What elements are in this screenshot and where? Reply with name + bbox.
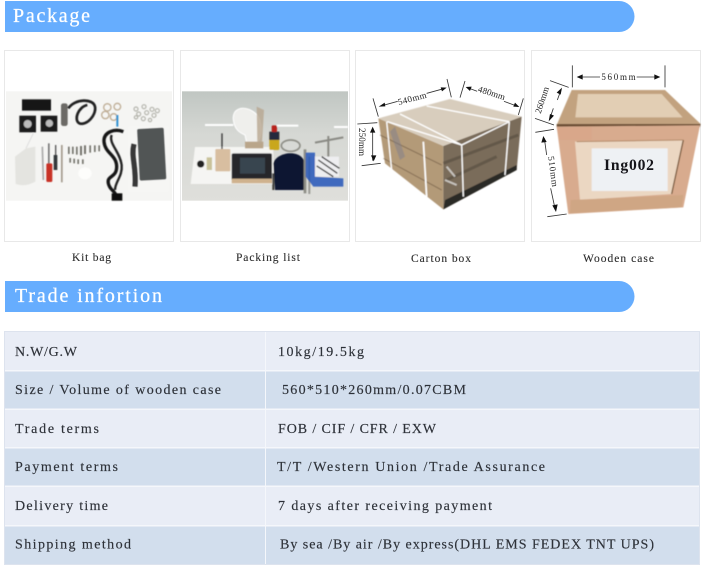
row: trade terms: FOB / CIF / CFR / EXW bbox=[278, 422, 437, 437]
row: payment terms: Payment terms bbox=[15, 460, 118, 475]
row: delivery time bbox=[5, 487, 699, 525]
row: trade terms bbox=[5, 410, 699, 447]
dimension: 540mm bbox=[373, 79, 451, 117]
photo: wooden case with label bbox=[533, 65, 701, 217]
row: size and volume: Size / Volume of wooden case bbox=[15, 383, 221, 398]
row: trade terms: Trade terms bbox=[15, 422, 99, 437]
dimension: 510mm: 510mm bbox=[546, 156, 560, 187]
panel: carton box bbox=[356, 50, 524, 242]
caption: Carton box: Carton box bbox=[411, 253, 471, 265]
row: shipping method: By sea /By air /By express(DHL EMS FEDEX TNT UPS) bbox=[280, 538, 654, 552]
dimension: 250mm bbox=[357, 123, 381, 166]
row: payment terms bbox=[5, 448, 699, 486]
heading bar: Trade infortion bbox=[5, 281, 634, 312]
dimension: 250mm: 250mm bbox=[357, 128, 367, 156]
row: delivery time: Delivery time bbox=[15, 499, 108, 514]
photo: kit bag contents bbox=[6, 91, 172, 201]
row: N.W/G.W: N.W/G.W bbox=[15, 345, 78, 360]
label: Ing002: Ing002 bbox=[604, 157, 654, 174]
dimension: 260mm bbox=[533, 81, 569, 125]
row: size and volume: 560*510*260mm/0.07CBM bbox=[282, 383, 467, 398]
dimension: 510mm bbox=[535, 129, 567, 217]
caption: Kit bag: Kit bag bbox=[72, 252, 111, 264]
dimension: 560mm bbox=[572, 65, 665, 87]
row: shipping method: Shipping method bbox=[15, 538, 131, 552]
table: trade information bbox=[4, 332, 700, 564]
caption: Wooden case: Wooden case bbox=[583, 253, 654, 265]
photo: taped carton box bbox=[357, 79, 523, 209]
heading bar: Package: Package bbox=[13, 5, 90, 27]
row: N.W/G.W: 10kg/19.5kg bbox=[278, 345, 364, 360]
panel: packing list bbox=[180, 50, 350, 242]
row: size and volume bbox=[5, 372, 699, 408]
panel: wooden case bbox=[532, 50, 701, 242]
panel: kit bag bbox=[4, 50, 174, 242]
dimension: 480mm bbox=[460, 81, 523, 115]
dimension: 480mm: 480mm bbox=[477, 84, 507, 102]
row: shipping method bbox=[5, 526, 699, 564]
heading bar: Trade infortion: Trade infortion bbox=[15, 285, 162, 307]
dimension: 260mm: 260mm bbox=[533, 86, 551, 115]
dimension: 560mm: 560mm bbox=[601, 72, 636, 82]
caption: Packing list: Packing list bbox=[236, 252, 301, 264]
row: delivery time: 7 days after receiving payment bbox=[278, 499, 492, 514]
row: payment terms: T/T /Western Union /Trade Assurance bbox=[277, 460, 545, 475]
heading bar: Package bbox=[5, 1, 634, 32]
row: N.W/G.W bbox=[5, 332, 699, 370]
photo: packing list contents bbox=[182, 91, 348, 201]
dimension: 540mm: 540mm bbox=[397, 90, 428, 107]
